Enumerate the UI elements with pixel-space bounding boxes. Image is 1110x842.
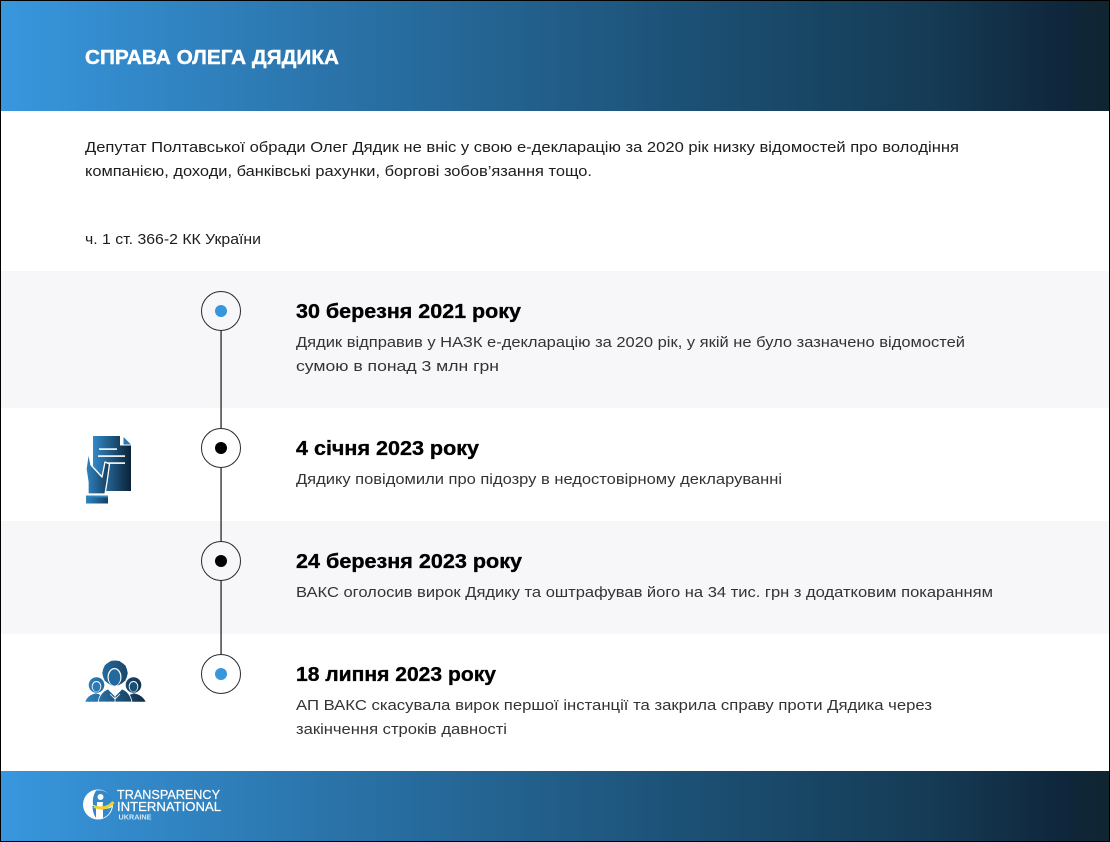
timeline vertical line <box>220 311 222 674</box>
intro text: Депутат Полтавської обради Олег Дядик не вніс у свою е-декларацію за 2020 рік низку відомостей про володіння <box>85 139 959 156</box>
event: 24 March 2023 <box>296 551 993 601</box>
header band <box>0 0 1110 111</box>
event: 30 March 2021 <box>296 301 965 375</box>
event: 24 March 2023: 24 березня 2023 року <box>296 551 523 573</box>
logo emblem <box>83 790 114 820</box>
logo: Transparency International Ukraine: INTERNATIONAL <box>117 800 221 814</box>
event: 24 March 2023: ВАКС оголосив вирок Дядику та оштрафував його на 34 тис. грн з додатковим покаранням <box>296 584 993 601</box>
logo: Transparency International Ukraine: UKRAINE <box>118 814 152 822</box>
intro text <box>85 139 959 180</box>
event: 4 January 2023: Дядику повідомили про підозру в недостовірному декларуванні <box>296 471 782 488</box>
row background: 30 March 2021 <box>0 271 1110 408</box>
logo: Transparency International Ukraine <box>83 788 221 822</box>
icon: group of people <box>85 660 146 702</box>
event: 4 January 2023 <box>296 438 782 488</box>
timeline marker: 24 March 2023 <box>202 542 240 580</box>
timeline marker: 30 March 2021 <box>202 292 240 330</box>
timeline marker: 4 January 2023 <box>202 428 240 468</box>
event: 30 March 2021: 30 березня 2021 року <box>296 301 522 323</box>
row background: 24 March 2023 <box>0 521 1110 634</box>
event: 18 July 2023: АП ВАКС скасувала вирок першої інстанції та закрила справу проти Дядика через <box>296 697 932 714</box>
event: 18 July 2023: 18 липня 2023 року <box>296 664 497 686</box>
footer band <box>0 771 1110 842</box>
event: 30 March 2021: Дядик відправив у НАЗК е-декларацію за 2020 рік, у якій не було зазначено відомостей <box>296 334 965 351</box>
timeline marker: 18 July 2023 <box>202 654 240 694</box>
event: 30 March 2021: сумою в понад 3 млн грн <box>296 358 499 375</box>
event: 18 July 2023: закінчення строків давності <box>296 721 507 738</box>
logo: Transparency International Ukraine: TRANSPARENCY <box>117 788 221 802</box>
legal article reference: ч. 1 ст. 366-2 КК України <box>85 231 261 248</box>
event: 4 January 2023: 4 січня 2023 року <box>296 438 480 460</box>
event: 18 July 2023 <box>296 664 932 738</box>
title: СПРАВА ОЛЕГА ДЯДИКА <box>85 47 339 69</box>
intro text: компанією, доходи, банківські рахунки, боргові зобов’язання тощо. <box>85 163 592 180</box>
icon: hand holding document <box>86 436 131 504</box>
